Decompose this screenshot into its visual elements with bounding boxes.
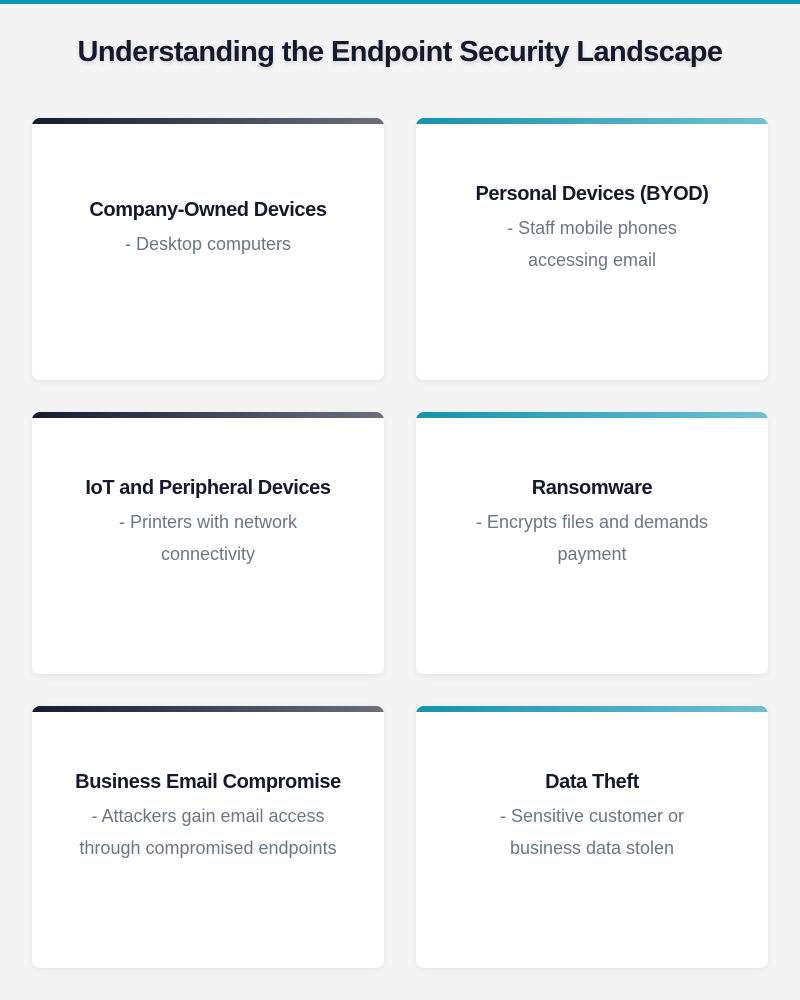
panel: IoT: - Printers with network <box>119 512 297 532</box>
panel: business email compromise: Business Email Compromise <box>75 770 341 792</box>
panel: personal devices: accessing email <box>528 250 656 270</box>
panel: data theft <box>416 706 768 968</box>
top accent bar <box>0 0 800 4</box>
panel: company-owned devices <box>32 118 384 380</box>
panel: business email compromise <box>32 706 384 968</box>
panel: data theft: Data Theft <box>545 770 639 792</box>
panel: personal devices: Personal Devices (BYOD) <box>475 182 709 204</box>
panel: business email compromise: through compromised endpoints <box>79 838 337 858</box>
panel: company-owned devices: - Desktop computers <box>125 234 291 254</box>
panel: ransomware: payment <box>557 544 627 564</box>
panel: ransomware: - Encrypts files and demands <box>476 512 708 532</box>
panel: ransomware: Ransomware <box>532 476 652 498</box>
panel: company-owned devices: Company-Owned Devices <box>89 198 327 220</box>
panel: IoT: IoT and Peripheral Devices <box>85 476 331 498</box>
panel: data theft: business data stolen <box>510 838 674 858</box>
panel: personal devices <box>416 118 768 380</box>
panel: business email compromise: - Attackers gain email access <box>91 806 325 826</box>
panel: data theft: - Sensitive customer or <box>500 806 684 826</box>
panel: IoT: connectivity <box>161 544 255 564</box>
panel: ransomware <box>416 412 768 674</box>
title: Understanding the Endpoint Security Landscape <box>78 36 722 68</box>
panel: IoT <box>32 412 384 674</box>
panel: personal devices: - Staff mobile phones <box>507 218 677 238</box>
